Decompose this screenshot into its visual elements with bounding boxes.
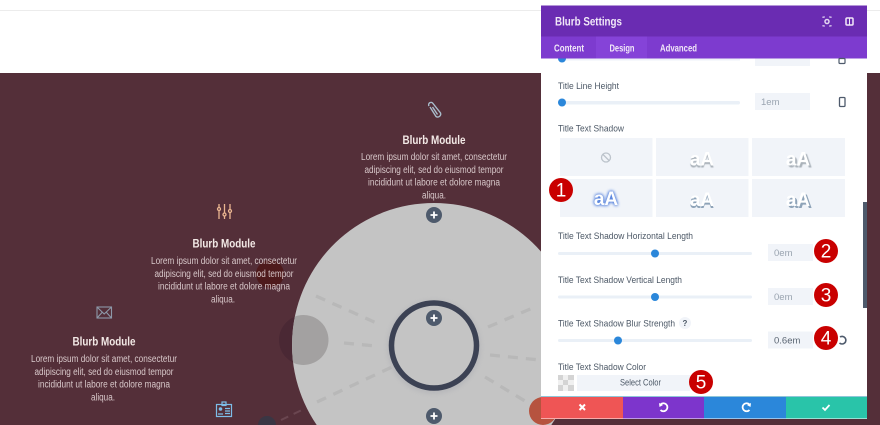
title line height control: 1em bbox=[761, 97, 780, 108]
blurb: top: incididunt ut labore et dolore magna bbox=[368, 178, 500, 188]
callout 5 bbox=[689, 370, 713, 394]
icon: id badge bbox=[216, 402, 232, 416]
horizontal length slider: Title Text Shadow Horizontal Length bbox=[558, 231, 693, 242]
blurb: lower left: aliqua. bbox=[91, 392, 115, 404]
title text shadow presets: aA bbox=[786, 150, 810, 170]
settings panel bbox=[541, 5, 867, 419]
blurb: top: adipiscing elit, sed do eiusmod tempor bbox=[364, 165, 504, 176]
blurb: lower left bbox=[31, 334, 178, 404]
icon: envelope bbox=[97, 307, 112, 318]
blurb: middle: incididunt ut labore et dolore magna bbox=[158, 282, 290, 292]
callout 1 bbox=[549, 178, 573, 202]
orange circle bottom right bbox=[529, 397, 557, 425]
panel header bbox=[541, 6, 867, 36]
callout 2: 2 bbox=[821, 242, 831, 262]
panel tabs bbox=[541, 36, 867, 58]
blurb: top: Blurb Module bbox=[402, 133, 466, 147]
title text shadow presets: aA bbox=[594, 189, 618, 210]
dark circle left of wheel bbox=[279, 315, 329, 365]
blurb: middle: Blurb Module bbox=[192, 236, 256, 250]
panel header: Blurb Settings bbox=[555, 14, 622, 28]
blurb: lower left: Blurb Module bbox=[72, 334, 136, 348]
blur strength slider: Title Text Shadow Blur Strength bbox=[558, 318, 675, 330]
icon: sliders bbox=[218, 204, 232, 219]
vertical length slider: Title Text Shadow Vertical Length bbox=[558, 275, 682, 286]
horizontal length slider: 0em bbox=[774, 248, 793, 259]
plus button centre bbox=[426, 310, 442, 326]
scrollbar bbox=[863, 202, 867, 308]
callout 3 bbox=[814, 283, 838, 307]
icon: paperclip bbox=[429, 102, 441, 117]
blurb: middle bbox=[151, 236, 298, 306]
title text shadow presets: aA bbox=[690, 190, 714, 211]
faint dashed line bottom left bbox=[281, 408, 306, 420]
blurb: lower left: incididunt ut labore et dolore magna bbox=[38, 380, 170, 390]
blurb: middle: adipiscing elit, sed do eiusmod tempor bbox=[154, 269, 294, 280]
clipped slider row bbox=[558, 58, 845, 66]
plus button top bbox=[426, 207, 442, 223]
title line height control: Title Line Height bbox=[558, 81, 619, 92]
callout 2 bbox=[814, 239, 838, 263]
title text shadow presets: aA bbox=[786, 190, 810, 211]
title text shadow presets bbox=[558, 124, 845, 217]
blur strength slider: ? bbox=[683, 319, 688, 328]
blurb: lower left: Lorem ipsum dolor sit amet, consectetur bbox=[31, 354, 178, 365]
vertical length slider: 0em bbox=[774, 292, 793, 303]
callout 1: 1 bbox=[556, 180, 566, 202]
horizontal length slider bbox=[558, 231, 813, 261]
panel tabs: Advanced bbox=[660, 44, 697, 54]
title text shadow presets: aA bbox=[690, 150, 714, 170]
blur strength slider bbox=[558, 317, 846, 348]
callout 4: 4 bbox=[821, 328, 832, 350]
title text shadow presets: Title Text Shadow bbox=[558, 124, 624, 134]
callout 3: 3 bbox=[821, 286, 831, 306]
shadow color picker: Title Text Shadow Color bbox=[558, 362, 646, 373]
blurb: top: aliqua. bbox=[422, 190, 446, 202]
plus button bottom bbox=[426, 408, 442, 424]
blurb: middle: Lorem ipsum dolor sit amet, consectetur bbox=[151, 256, 298, 267]
blur strength slider: 0.6em bbox=[774, 336, 800, 346]
blurb: middle: aliqua. bbox=[211, 294, 235, 306]
panel tabs: Content bbox=[554, 44, 585, 54]
vertical length slider bbox=[558, 275, 813, 305]
title line height control bbox=[558, 81, 845, 110]
dark decorative circle behind text bbox=[256, 260, 284, 288]
dark small circle bottom left bbox=[258, 416, 276, 425]
callout 5: 5 bbox=[696, 372, 706, 394]
blurb: top bbox=[361, 133, 508, 202]
decorative wheel graphic bbox=[292, 203, 576, 425]
blurb: top: Lorem ipsum dolor sit amet, consectetur bbox=[361, 152, 508, 163]
callout 4 bbox=[814, 326, 838, 350]
blurb: lower left: adipiscing elit, sed do eiusmod tempor bbox=[34, 367, 174, 378]
shadow color picker bbox=[558, 362, 690, 391]
footer action buttons bbox=[541, 396, 867, 418]
panel tabs: Design bbox=[610, 44, 634, 54]
shadow color picker: Select Color bbox=[620, 378, 661, 388]
